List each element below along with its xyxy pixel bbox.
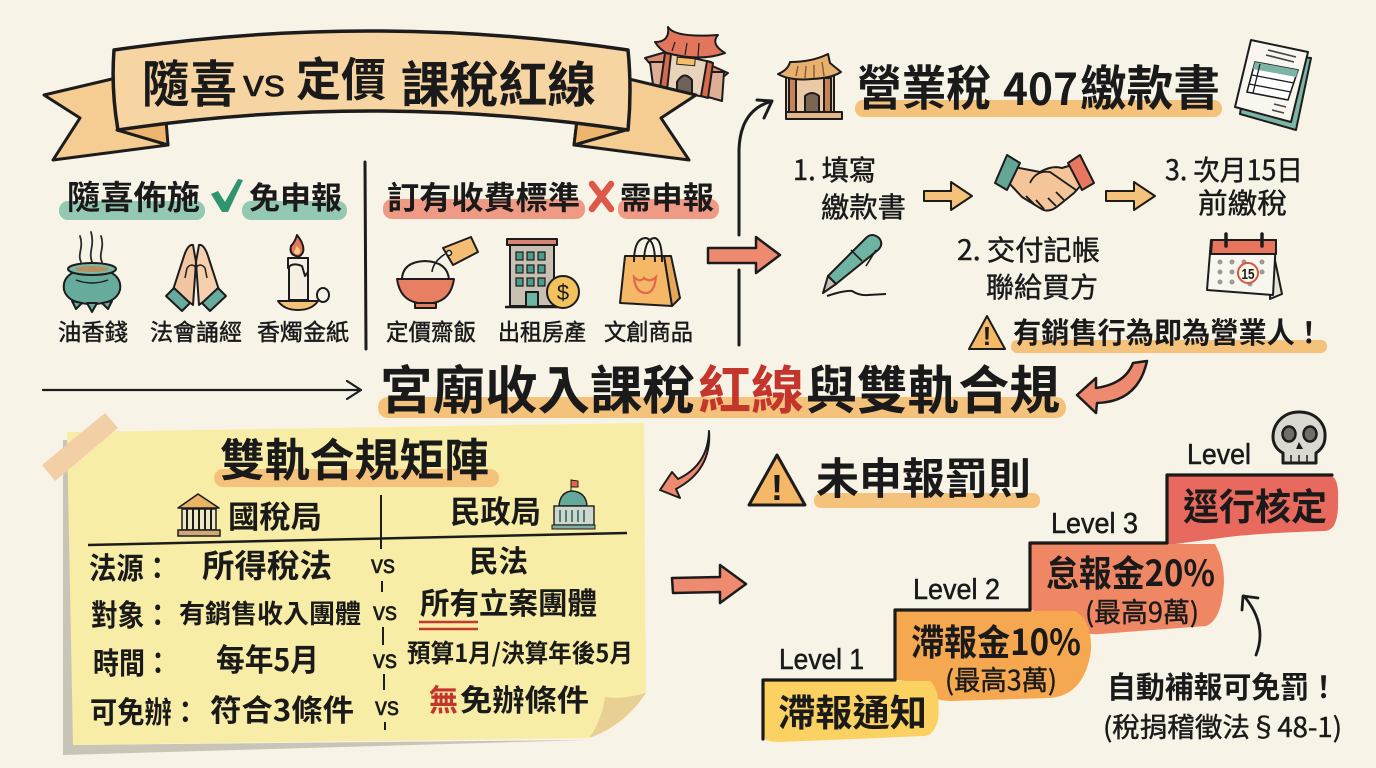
panel: free of reporting [58, 171, 349, 347]
row: target: 有銷售收入團體 [179, 594, 361, 631]
panel: penalties [749, 412, 1342, 745]
heading: 營業稅 407 繳款書: 繳款書 [1080, 49, 1220, 119]
central heading [378, 349, 1066, 424]
label: 定價齋飯: 定價齋飯 [386, 313, 476, 347]
arrow: long black into central heading [43, 381, 361, 399]
icon: rental building [505, 239, 579, 308]
row: exemption: 符合3條件 [210, 686, 354, 730]
row: target: vs [373, 596, 397, 626]
icon: calendar [1207, 234, 1282, 299]
icon: warning [749, 455, 805, 508]
step 3: (最高9萬) [1085, 591, 1199, 630]
label: 法會誦經: 法會誦經 [150, 313, 242, 347]
central heading: 與雙軌合規 [806, 349, 1060, 424]
icon: cross [592, 184, 611, 209]
step 1: 滯報通知 [778, 683, 927, 737]
note fold [589, 693, 646, 738]
step 3 [1031, 544, 1224, 634]
icon: civil affairs bureau [552, 480, 595, 529]
step 2 text [957, 229, 1100, 306]
heading: 營業稅 407 繳款書: 營業稅 [857, 49, 991, 119]
icon: candle [278, 235, 329, 310]
matrix title: 雙軌合規矩陣 [220, 424, 489, 489]
step 3 text: 前繳稅 [1198, 182, 1287, 222]
tape [42, 413, 118, 481]
step 2 text: 聯給買方 [986, 266, 1098, 306]
arrow: red curved to heading [1077, 361, 1147, 413]
icon: rice bowl with price tag [397, 237, 478, 308]
row: timing: 每年5月 [216, 635, 319, 680]
heading: 未申報罰則: 未申報罰則 [816, 445, 1031, 507]
callout: self report exemption: 自動補報可免罰！ [1107, 663, 1338, 707]
divider between panels [365, 162, 366, 349]
icon: tax bureau [178, 494, 220, 536]
row: legal source: 法源： [89, 544, 171, 588]
level labels [779, 439, 1251, 676]
arrow: self report note to step 3 [1242, 596, 1260, 655]
step 1 text: 1. 填寫 [793, 149, 876, 189]
row: target: 對象： [91, 591, 171, 635]
row: exemption: 免辦條件 [460, 676, 589, 720]
step 4 [1168, 476, 1338, 545]
level labels: Level [1187, 439, 1251, 471]
icon: temple red [645, 27, 728, 101]
label: 油香錢: 油香錢 [58, 313, 128, 347]
panel: business tax form 407 [778, 40, 1327, 353]
step 2 [896, 611, 1091, 701]
label: 文創商品: 文創商品 [604, 313, 693, 347]
step 3: 怠報金20% [1046, 545, 1215, 597]
title banner [44, 31, 696, 160]
step 2: (最高3萬) [945, 659, 1057, 698]
heading: 隨喜佈施: 隨喜佈施 [67, 171, 200, 219]
title text: 課稅紅線 [401, 46, 596, 117]
row: timing: 時間： [93, 639, 171, 683]
panel: must report [383, 173, 719, 347]
icon: shopping bag [620, 238, 680, 306]
arrow: curved black to form 407 [739, 100, 772, 345]
level labels: Level 1 [779, 644, 864, 676]
panel: dual compliance matrix sticky note [42, 413, 646, 755]
icon: skull [1273, 412, 1325, 463]
row: timing: 預算1月/決算年後5月 [407, 634, 633, 670]
icon: form document [1235, 40, 1311, 130]
central heading: 宮廟收入課稅 [380, 349, 695, 424]
step 1 text: 繳款書 [821, 186, 906, 226]
arrow: matrix to penalties [672, 565, 746, 603]
header: 國稅局: 國稅局 [228, 492, 322, 537]
callout: self report exemption: (稅捐稽徵法§48-1) [1103, 706, 1342, 745]
note shadow [63, 440, 589, 755]
header: 民政局: 民政局 [450, 487, 541, 532]
step 1 text [793, 149, 906, 226]
icon: cauldron [64, 232, 120, 312]
step 2: 滯報金10% [911, 614, 1081, 666]
callout: self report exemption [1103, 663, 1342, 745]
stair outline [763, 475, 1332, 739]
heading: 營業稅 407 繳款書 [855, 49, 1222, 119]
row: legal source: vs [371, 549, 395, 579]
label: 香燭金紙: 香燭金紙 [257, 313, 349, 347]
arrow: red to form 407 steps [708, 237, 780, 273]
row: legal source [89, 537, 528, 588]
row: target [91, 579, 597, 635]
row: legal source: 民法 [469, 537, 528, 581]
arrow: step 1 to 2 [924, 182, 972, 210]
row: legal source: 所得稅法 [202, 541, 332, 587]
row: timing [93, 634, 633, 683]
label: 出租房產: 出租房產 [498, 313, 586, 347]
note paper [67, 423, 646, 745]
heading: 免申報: 免申報 [249, 173, 342, 218]
callout: seller warning: 有銷售行為即為營業人！ [1013, 310, 1323, 352]
row: exemption: vs [375, 691, 399, 721]
row: exemption: 可免辦： [90, 688, 199, 732]
arrow: step 2 to 3 [1106, 182, 1155, 210]
step 3 text: 3. 次月15日 [1165, 149, 1303, 189]
icon: handshake [995, 155, 1094, 211]
icon: pen [823, 235, 886, 296]
row: timing: vs [373, 644, 397, 674]
level labels: Level 2 [913, 574, 1000, 606]
icon: warning: ! [771, 467, 783, 508]
title text: vs [243, 63, 285, 105]
icon: temple brown [778, 54, 842, 119]
step 4: 逕行核定 [1183, 477, 1327, 531]
banner ribbon [44, 31, 696, 160]
table rules [88, 495, 627, 730]
row: exemption: 無 [429, 676, 458, 720]
heading: 訂有收費標準: 訂有收費標準 [387, 173, 580, 219]
icon: rental building: $ [557, 280, 569, 305]
title text [142, 44, 596, 117]
heading: 需申報: 需申報 [620, 173, 714, 218]
arrow: curved to matrix [660, 431, 709, 498]
level labels: Level 3 [1051, 508, 1138, 540]
step 3 text [1165, 149, 1303, 222]
row: exemption [90, 676, 589, 732]
row: target: 所有立案團體 [420, 579, 597, 623]
title text: 定價 [296, 44, 386, 110]
callout: seller warning: ! [983, 321, 991, 351]
step 2 text: 2. 交付記帳 [957, 229, 1100, 269]
icon: praying hands [166, 245, 226, 311]
icon: calendar: 15 [1242, 266, 1254, 283]
heading: 營業稅 407 繳款書: 407 [1003, 54, 1078, 118]
central heading: 紅線 [698, 349, 804, 424]
icon: check [211, 179, 243, 212]
title text: 隨喜 [142, 45, 237, 117]
